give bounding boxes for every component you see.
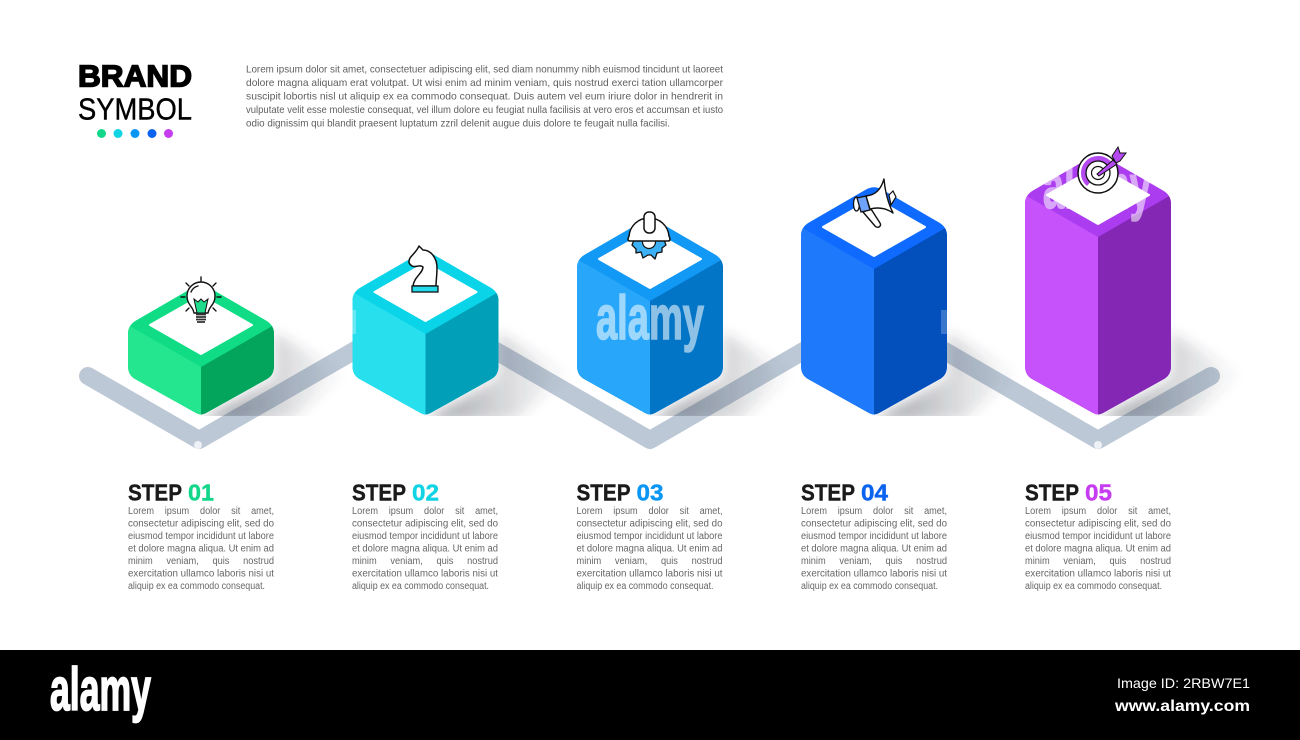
step 01 text: Lorem ipsum dolor sit amet, <box>128 506 274 517</box>
cube 2: cyan <box>352 254 498 414</box>
brand logo: SYMBOL <box>78 92 192 126</box>
step 01 text <box>128 480 274 592</box>
step 02 text: consectetur adipiscing elit, sed do <box>352 518 498 530</box>
cube 4: blue <box>801 187 947 414</box>
step 02 text <box>352 480 498 592</box>
step 04 text: et dolore magna aliqua. Ut enim ad <box>801 544 947 554</box>
step 03 text: consectetur adipiscing elit, sed do <box>576 518 723 530</box>
cube 1: green <box>128 290 274 414</box>
step 02 text: 02 <box>412 480 439 506</box>
step 01 text: consectetur adipiscing elit, sed do <box>128 518 274 530</box>
step 02 text: et dolore magna aliqua. Ut enim ad <box>352 544 498 554</box>
step 01 text: et dolore magna aliqua. Ut enim ad <box>128 544 274 554</box>
step 05 text: consectetur adipiscing elit, sed do <box>1025 518 1171 530</box>
icon: chess knight <box>409 246 438 292</box>
brand logo <box>78 58 192 138</box>
step 02 text: aliquip ex ea commodo consequat. <box>352 581 489 592</box>
step 05 text: aliquip ex ea commodo consequat. <box>1025 581 1162 592</box>
footer bar: Image ID: 2RBW7E1 <box>1117 675 1250 691</box>
intro text block: odio dignissim qui blandit praesent luptatum zzril delenit augue duis dolore te feugait nulla facilisi. <box>246 118 670 130</box>
step 01 text: minim veniam, quis nostrud <box>128 556 274 567</box>
step 04 text: Lorem ipsum dolor sit amet, <box>801 506 947 517</box>
step 02 text: exercitation ullamco laboris nisi ut <box>352 568 498 580</box>
icon: target with arrow <box>1078 147 1126 193</box>
icon: light bulb <box>181 277 221 322</box>
step 03 text: minim veniam, quis nostrud <box>576 556 722 567</box>
step 05 text: eiusmod tempor incididunt ut labore <box>1025 531 1171 542</box>
step 05 text: Lorem ipsum dolor sit amet, <box>1025 506 1171 517</box>
step 04 text: STEP <box>801 480 855 506</box>
step 03 text: eiusmod tempor incididunt ut labore <box>576 531 723 542</box>
step 02 text: eiusmod tempor incididunt ut labore <box>352 531 498 542</box>
step 03 text: exercitation ullamco laboris nisi ut <box>576 568 723 580</box>
step 03 text: et dolore magna aliqua. Ut enim ad <box>576 544 722 554</box>
step 01 text: eiusmod tempor incididunt ut labore <box>128 531 274 542</box>
step 01 text: aliquip ex ea commodo consequat. <box>128 581 265 592</box>
icon: megaphone <box>854 179 896 227</box>
step 04 text <box>801 480 947 592</box>
step 03 text: Lorem ipsum dolor sit amet, <box>576 506 722 517</box>
step 05 text: minim veniam, quis nostrud <box>1025 556 1171 567</box>
path tip highlights <box>194 441 1102 449</box>
cube 3: light blue <box>577 226 723 414</box>
intro text block <box>246 64 723 130</box>
step 03 text: STEP <box>576 480 630 506</box>
step 01 text: exercitation ullamco laboris nisi ut <box>128 568 274 580</box>
step 05 text: 05 <box>1085 480 1112 506</box>
footer bar: alamy <box>50 656 151 723</box>
step 04 text: eiusmod tempor incididunt ut labore <box>801 531 947 542</box>
step 05 text: et dolore magna aliqua. Ut enim ad <box>1025 544 1171 554</box>
step 03 text <box>576 480 723 592</box>
watermark on cubes: alamy <box>1043 153 1151 222</box>
step 02 text: STEP <box>352 480 406 506</box>
step 04 text: aliquip ex ea commodo consequat. <box>801 581 938 592</box>
step 05 text: exercitation ullamco laboris nisi ut <box>1025 568 1171 580</box>
footer bar <box>0 650 1300 740</box>
step 01 text: STEP <box>128 480 182 506</box>
step 02 text: Lorem ipsum dolor sit amet, <box>352 506 498 517</box>
cube 5: purple <box>1025 163 1171 414</box>
footer bar: www.alamy.com <box>1114 698 1250 715</box>
intro text block: Lorem ipsum dolor sit amet, consectetuer adipiscing elit, sed diam nonummy nibh euismod tincidunt ut laoreet <box>246 64 723 76</box>
step 03 text: 03 <box>636 480 664 506</box>
timeline path <box>88 310 1211 440</box>
step 04 text: exercitation ullamco laboris nisi ut <box>801 568 947 580</box>
watermark on cubes: alamy <box>596 284 704 353</box>
intro text block: dolore magna aliquam erat volutpat. Ut wisi enim ad minim veniam, quis nostrud exerci tation ullamcorper <box>246 77 723 89</box>
step 04 text: consectetur adipiscing elit, sed do <box>801 518 947 530</box>
step 05 text: STEP <box>1025 480 1079 506</box>
icon: helmet and gear <box>628 212 670 259</box>
step 05 text <box>1025 480 1171 592</box>
step 04 text: 04 <box>861 480 888 506</box>
step 02 text: minim veniam, quis nostrud <box>352 556 498 567</box>
intro text block: vulputate velit esse molestie consequat, vel illum dolore eu feugiat nulla facilisis at vero eros et accumsan et iusto <box>246 104 723 116</box>
cube shadows <box>201 332 1242 420</box>
intro text block: suscipit lobortis nisl ut aliquip ex ea commodo consequat. Duis autem vel eum iriure dolor in hendrerit in <box>246 90 723 102</box>
step 01 text: 01 <box>188 480 214 506</box>
brand logo: BRAND <box>78 58 192 94</box>
watermark on cubes <box>352 153 1151 353</box>
step 03 text: aliquip ex ea commodo consequat. <box>576 581 714 592</box>
step 04 text: minim veniam, quis nostrud <box>801 556 947 567</box>
